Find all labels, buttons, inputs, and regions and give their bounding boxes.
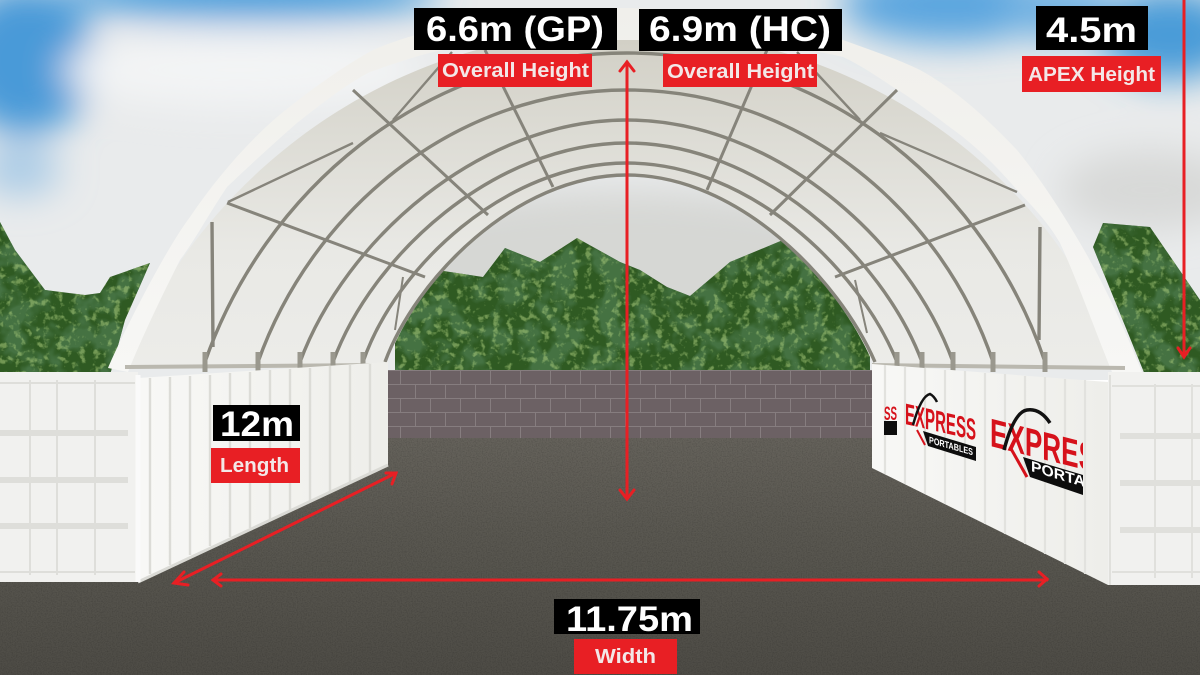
ribs xyxy=(205,53,1045,362)
left shipping container xyxy=(0,362,388,582)
label: Overall Height left: Overall Height xyxy=(442,60,589,82)
purlins and braces xyxy=(212,50,1040,347)
right shipping container xyxy=(872,364,1200,585)
base rail xyxy=(125,365,1125,368)
label: 12m: 12m xyxy=(220,405,294,444)
canopy front rim xyxy=(108,8,1142,372)
label: Length xyxy=(211,448,300,483)
partial logo xyxy=(884,404,897,435)
sky background xyxy=(0,0,1200,380)
side wall xyxy=(872,364,1108,585)
brick wall xyxy=(380,370,880,440)
logo one: EXPRESS xyxy=(905,397,976,447)
side wall xyxy=(138,362,388,582)
partial logo: SS xyxy=(884,404,897,425)
label: Length: Length xyxy=(220,455,289,477)
Express Portables logos xyxy=(884,394,1096,495)
logo one xyxy=(905,394,976,461)
label: Width xyxy=(574,639,677,674)
logo two: EXPRES xyxy=(990,410,1096,481)
label: APEX Height: APEX Height xyxy=(1028,64,1155,86)
label: 6.9m (HC): 6.9m (HC) xyxy=(649,10,831,49)
label: Overall Height left xyxy=(438,54,592,87)
arrow: overall height xyxy=(620,62,634,499)
logo two xyxy=(992,408,1083,495)
arrow: apex height xyxy=(1178,0,1190,357)
trees xyxy=(0,220,1200,375)
door face xyxy=(0,372,138,582)
label: 11.75m: 11.75m xyxy=(566,600,693,639)
label: Overall Height right: Overall Height xyxy=(667,61,814,83)
ground floor xyxy=(0,438,1200,675)
logo one: PORTABLES xyxy=(929,435,973,458)
label: APEX Height xyxy=(1022,56,1161,92)
arrow: length xyxy=(174,473,396,585)
label: Overall Height right xyxy=(663,54,817,87)
logo two: PORTA xyxy=(1031,458,1085,491)
label: Width: Width xyxy=(595,646,656,668)
door face xyxy=(1108,372,1200,585)
dome canopy xyxy=(108,8,1142,372)
label: 6.6m (GP): 6.6m (GP) xyxy=(426,10,604,49)
label: 4.5m xyxy=(1036,6,1148,50)
canopy interior fabric xyxy=(128,30,1115,368)
arrow: width xyxy=(213,572,1047,586)
label: 4.5m: 4.5m xyxy=(1046,11,1137,50)
